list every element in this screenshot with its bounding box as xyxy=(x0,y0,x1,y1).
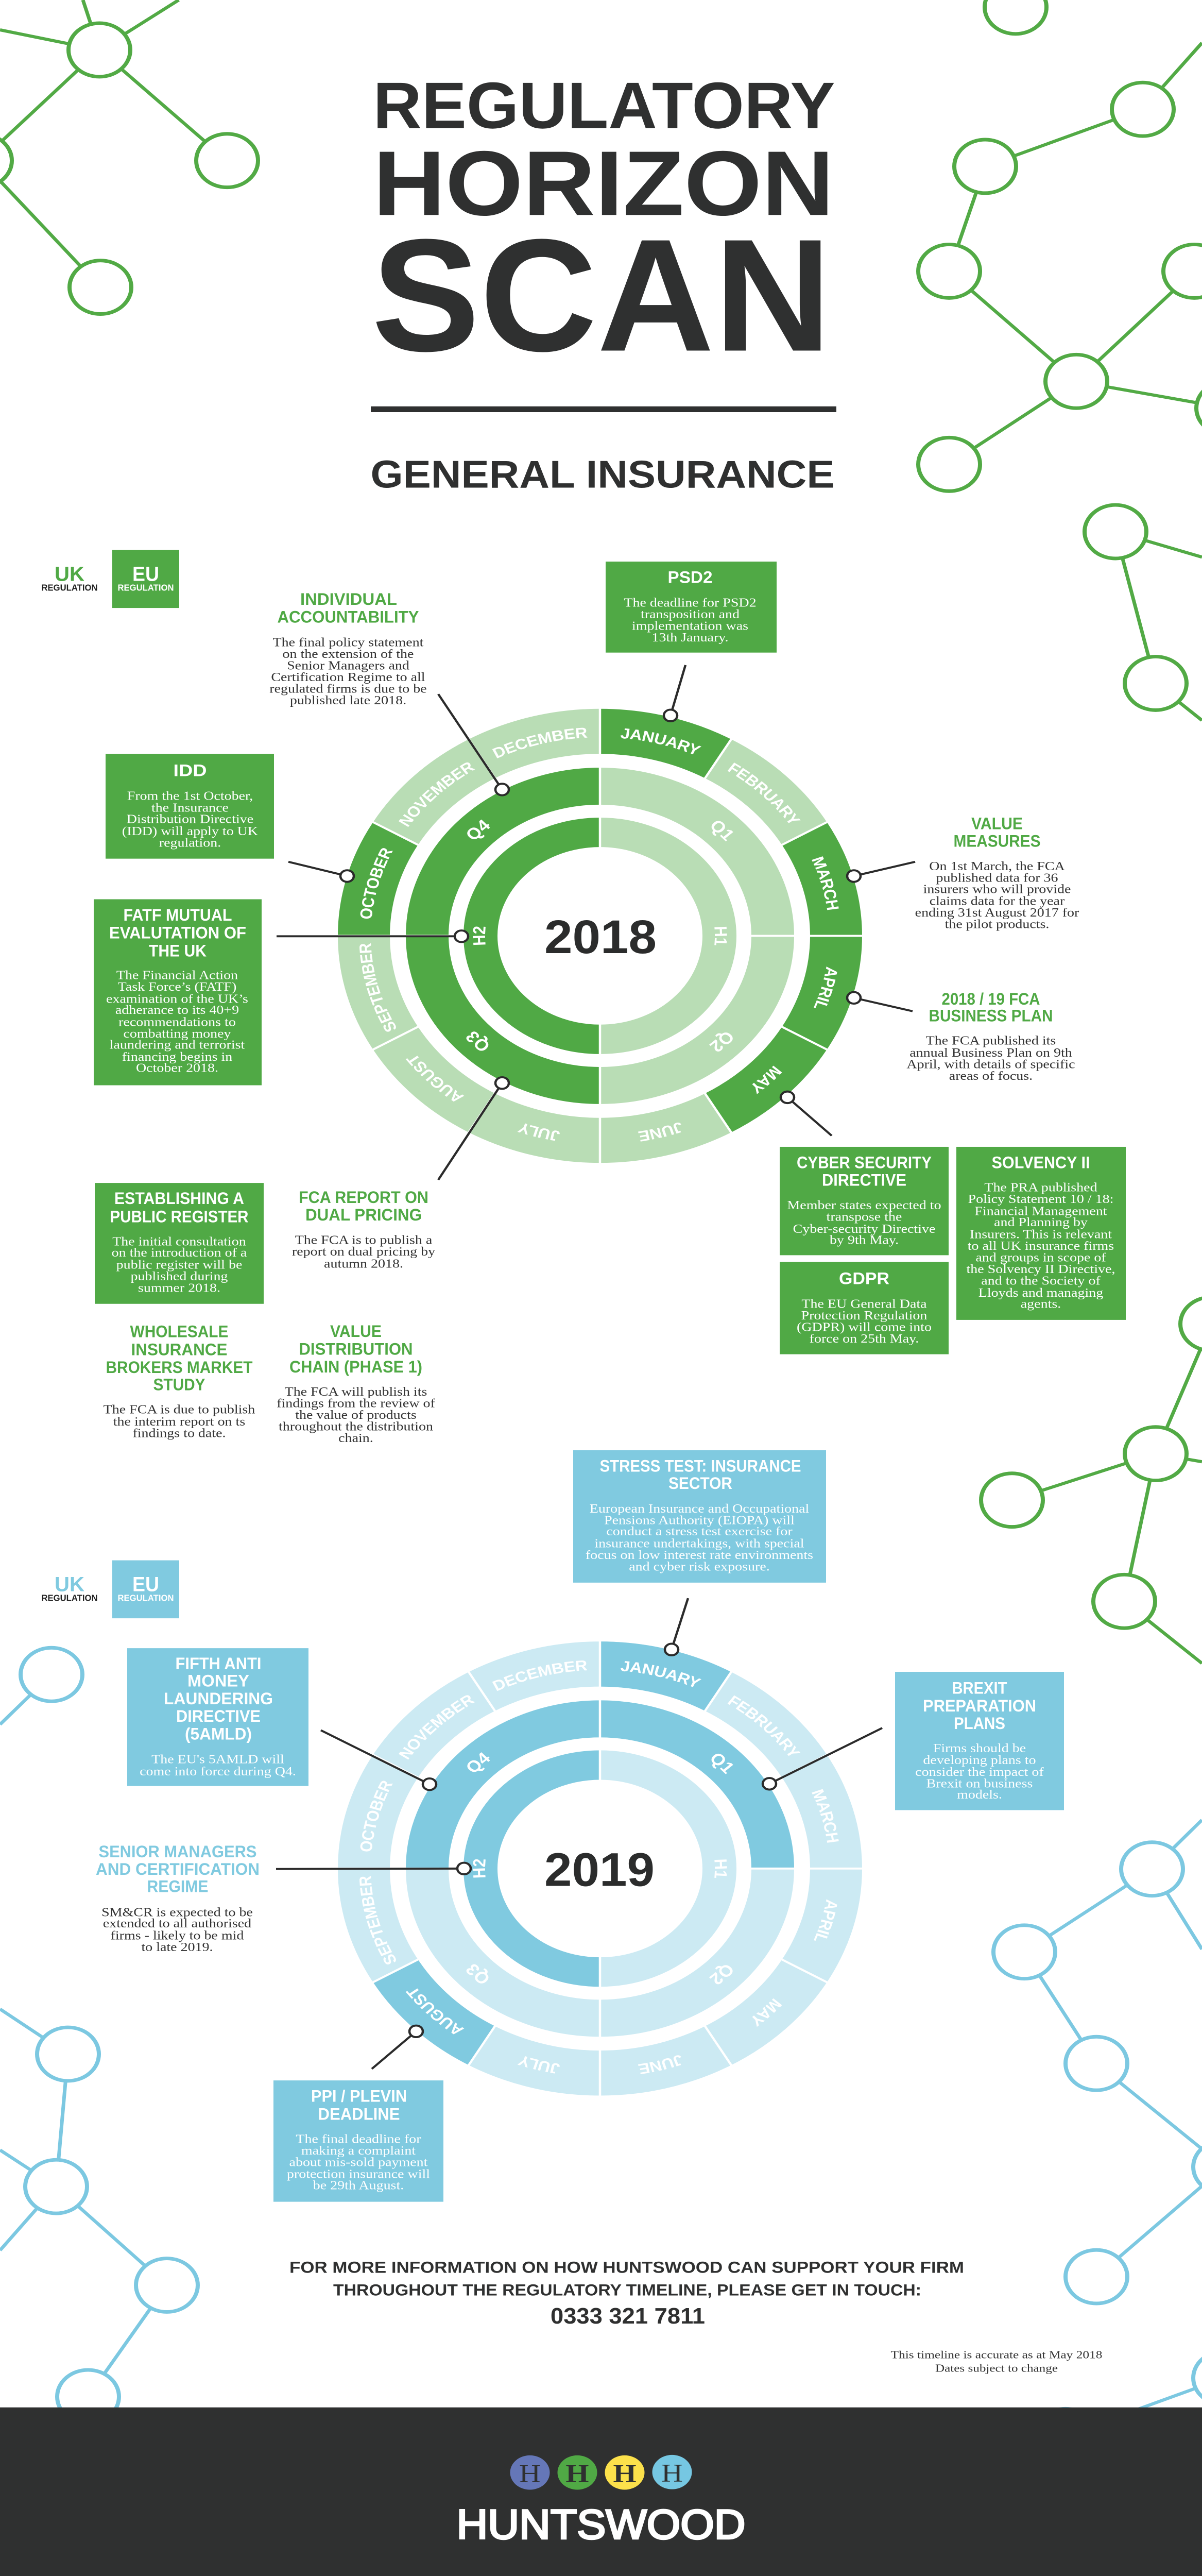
text block: value measures: ending 31st August 2017 for xyxy=(915,906,1079,920)
panel: establishing a public register: public register will be xyxy=(116,1258,242,1272)
panel: stress test: Pensions Authority (EIOPA) will xyxy=(604,1513,795,1527)
phone number: 0333 321 7811 xyxy=(551,2303,705,2328)
text block: individual accountability: Senior Managers and xyxy=(287,658,409,672)
quarter labels 2019: Q3 xyxy=(467,1964,488,1984)
logo mark: four H circles: H xyxy=(661,2459,683,2487)
legend: EU regulation: REGULATION xyxy=(118,583,174,592)
year 2018: 2018 xyxy=(544,911,657,964)
legend: EU regulation xyxy=(112,1561,179,1618)
leader: fifth AML directive xyxy=(321,1730,436,1790)
text block: individual accountability: published late 2018. xyxy=(290,693,406,707)
panel: fifth anti money laundering directive: FIFTH ANTI xyxy=(176,1655,262,1673)
panel: FATF mutual evaluation: laundering and terrorist xyxy=(110,1038,245,1052)
panel: GDPR: (GDPR) will come into xyxy=(797,1320,932,1334)
legend: UK regulation: UK xyxy=(55,563,84,586)
panel: PSD2: 13th January. xyxy=(652,631,728,645)
legend: EU regulation: REGULATION xyxy=(118,1593,174,1603)
panel: Solvency II: and Planning by xyxy=(994,1215,1088,1229)
panel: establishing a public register: PUBLIC REGISTER xyxy=(110,1208,249,1226)
panel: Solvency II: and groups in scope of xyxy=(975,1250,1106,1264)
month labels 2018: MARCH xyxy=(812,856,839,910)
quarter ring 2019 xyxy=(427,1719,772,2018)
month labels 2018: MAY xyxy=(752,1065,782,1094)
panel: PPI / Plevin deadline: about mis-sold payment xyxy=(289,2155,428,2169)
text block: value measures: the pilot products. xyxy=(945,917,1049,931)
panel: brexit preparation plans: developing plans to xyxy=(923,1753,1036,1767)
panel: brexit preparation plans: PREPARATION xyxy=(923,1697,1036,1715)
quarter labels 2019 xyxy=(462,1749,738,1988)
quarter labels 2018: Q4 xyxy=(467,819,490,839)
panel: FATF mutual evaluation: The Financial Action xyxy=(116,968,238,982)
month labels 2018: JULY xyxy=(517,1123,560,1141)
panel: cyber security directive: DIRECTIVE xyxy=(822,1172,906,1190)
panel: Solvency II: SOLVENCY II xyxy=(992,1154,1090,1172)
panel: PSD2: The deadline for PSD2 xyxy=(624,596,757,609)
half-year labels 2019: H2 xyxy=(469,1858,489,1879)
panel: stress test: SECTOR xyxy=(668,1475,732,1493)
legend 2019 xyxy=(41,1561,179,1618)
leader: FCA report on dual pricing xyxy=(438,1077,509,1180)
month labels 2018: APRIL xyxy=(814,967,837,1008)
month labels 2019: SEPTEMBER xyxy=(359,1876,396,1964)
month labels 2018: OCTOBER xyxy=(360,848,393,919)
month labels 2019: JULY xyxy=(517,2056,560,2074)
text block: senior managers and certification regime: extended to all authorised xyxy=(103,1917,251,1930)
panel: PSD2: PSD2 xyxy=(667,569,713,587)
panel: FATF mutual evaluation: adherance to its 40+9 xyxy=(115,1003,239,1017)
text block: senior managers and certification regime: SENIOR MANAGERS xyxy=(99,1843,256,1861)
panel: stress test: STRESS TEST: INSURANCE xyxy=(599,1458,801,1476)
title rule xyxy=(371,406,836,412)
logo mark: four H circles xyxy=(510,2455,692,2489)
panel: establishing a public register xyxy=(95,1183,264,1304)
panel: stress test: European Insurance and Occupational xyxy=(590,1502,809,1515)
call to action: THROUGHOUT THE REGULATORY TIMELINE, PLEASE GET IN TOUCH: xyxy=(333,2282,921,2299)
text block: wholesale insurance brokers market study: The FCA is due to publish xyxy=(104,1402,255,1416)
wheel 2018 xyxy=(335,706,865,1165)
text block: wholesale insurance brokers market study: STUDY xyxy=(153,1376,205,1394)
month labels 2018: NOVEMBER xyxy=(399,762,475,827)
accuracy note xyxy=(891,2349,1103,2374)
text block: wholesale insurance brokers market study: WHOLESALE xyxy=(130,1323,229,1341)
panel: stress test xyxy=(573,1450,826,1583)
panel: IDD: the Insurance xyxy=(151,801,229,815)
text block: FCA report on dual pricing: FCA REPORT ON xyxy=(299,1189,428,1207)
month labels 2019: AUGUST xyxy=(406,1989,465,2034)
quarter labels 2018: Q2 xyxy=(709,1032,733,1052)
month labels 2019: DECEMBER xyxy=(492,1660,587,1691)
legend: UK regulation xyxy=(41,1573,98,1603)
title line: scan: SCAN xyxy=(372,206,832,385)
month labels 2019: NOVEMBER xyxy=(399,1695,475,1760)
month labels 2018: FEBRUARY xyxy=(727,762,800,823)
legend: UK regulation: REGULATION xyxy=(41,1593,98,1603)
text block: senior managers and certification regime: firms - likely to be mid xyxy=(111,1928,244,1942)
text block: senior managers and certification regime: REGIME xyxy=(147,1878,209,1896)
text block: wholesale insurance brokers market study: INSURANCE xyxy=(131,1341,228,1359)
panel: cyber security directive: transpose the xyxy=(827,1210,902,1224)
half-year ring 2019 xyxy=(480,1765,719,1972)
panel: brexit preparation plans xyxy=(895,1672,1064,1810)
panel: FATF mutual evaluation xyxy=(94,899,262,1085)
panel: establishing a public register: published during xyxy=(131,1269,228,1283)
panel: GDPR xyxy=(780,1262,949,1354)
panel: fifth anti money laundering directive: The EU's 5AMLD will xyxy=(151,1752,284,1766)
panel: fifth anti money laundering directive: come into force during Q4. xyxy=(140,1765,296,1778)
text block: individual accountability: on the extension of the xyxy=(283,647,414,661)
quarter labels 2018: Q3 xyxy=(467,1031,488,1051)
panel: brexit preparation plans: Brexit on business xyxy=(926,1776,1033,1790)
panel: IDD: IDD xyxy=(174,762,207,780)
legend: UK regulation xyxy=(41,563,98,592)
text block: senior managers and certification regime: SM&CR is expected to be xyxy=(101,1905,253,1919)
panel: FATF mutual evaluation: THE UK xyxy=(149,942,207,960)
panel: FATF mutual evaluation: examination of the UK’s xyxy=(106,992,248,1006)
panel: brexit preparation plans: consider the impact of xyxy=(915,1765,1044,1778)
panel: cyber security directive xyxy=(780,1147,949,1255)
panel: IDD xyxy=(106,754,274,859)
year 2019: 2019 xyxy=(544,1843,655,1896)
text block: value distribution chain: VALUE xyxy=(330,1323,382,1341)
half-year labels 2019 xyxy=(469,1858,731,1879)
month ring 2018 xyxy=(364,731,836,1140)
panel: FATF mutual evaluation: Task Force’s (FATF) xyxy=(118,980,236,993)
text block: value measures: On 1st March, the FCA xyxy=(929,859,1065,873)
call to action xyxy=(289,2259,964,2328)
text block: 2018/19 FCA business plan: areas of focus. xyxy=(949,1069,1033,1083)
panel: stress test: conduct a stress test exercise for xyxy=(606,1524,793,1538)
quarter labels 2019: Q2 xyxy=(709,1965,733,1985)
panel: brexit preparation plans: Firms should be xyxy=(933,1741,1026,1755)
panel: cyber security directive: by 9th May. xyxy=(830,1233,899,1247)
network: green middle right xyxy=(981,1297,1202,1664)
month labels 2019: APRIL xyxy=(814,1899,837,1941)
text block: 2018/19 FCA business plan: 2018 / 19 FCA xyxy=(941,990,1040,1008)
text block: FCA report on dual pricing xyxy=(292,1189,435,1270)
panel: Solvency II xyxy=(956,1147,1126,1320)
month labels 2019: MARCH xyxy=(812,1789,839,1843)
leader: brexit xyxy=(763,1728,882,1790)
month labels 2019 xyxy=(355,1657,843,2077)
quarter labels 2019: Q4 xyxy=(462,1749,494,1777)
text block: individual accountability: INDIVIDUAL xyxy=(300,590,397,608)
network: green top right xyxy=(918,0,1202,720)
footer band xyxy=(0,2408,1202,2576)
text block: value distribution chain: findings from the review of xyxy=(277,1396,435,1410)
panel: FATF mutual evaluation: October 2018. xyxy=(136,1061,218,1075)
text block: individual accountability: Certification Regime to all xyxy=(271,670,425,684)
text block: FCA report on dual pricing: report on dual pricing by xyxy=(292,1245,435,1259)
text block: value distribution chain: The FCA will publish its xyxy=(285,1385,427,1399)
panel: fifth anti money laundering directive: MONEY xyxy=(187,1672,249,1690)
panel: stress test: insurance undertakings, with special xyxy=(594,1536,804,1550)
panel: Solvency II: Financial Management xyxy=(974,1204,1107,1218)
text block: individual accountability: regulated firms is due to be xyxy=(269,682,427,696)
text block: value distribution chain: throughout the distribution xyxy=(279,1419,433,1433)
subtitle: GENERAL INSURANCE xyxy=(371,453,835,496)
month labels 2018 xyxy=(355,724,843,1145)
title line: regulatory: REGULATORY xyxy=(373,70,835,142)
panel: fifth anti money laundering directive: (5AMLD) xyxy=(185,1725,252,1743)
month labels 2019: JANUARY xyxy=(621,1661,701,1687)
panel: GDPR: GDPR xyxy=(839,1270,889,1288)
panel: FATF mutual evaluation: recommendations to xyxy=(118,1015,236,1029)
logo mark: four H circles: H xyxy=(519,2459,541,2487)
quarter labels 2018: Q1 xyxy=(712,821,733,842)
text block: 2018/19 FCA business plan: April, with details of specific xyxy=(906,1057,1075,1071)
panel: fifth anti money laundering directive xyxy=(127,1648,308,1786)
legend: EU regulation: EU xyxy=(132,563,159,586)
quarter labels 2019: Q1 xyxy=(712,1754,733,1774)
logo mark: four H circles: H xyxy=(613,2459,637,2487)
legend 2018 xyxy=(41,550,179,608)
panel: PPI / Plevin deadline: making a complaint xyxy=(301,2144,416,2157)
panel: PSD2: transposition and xyxy=(641,607,740,621)
panel: Solvency II: Lloyds and managing xyxy=(978,1286,1103,1299)
panel: PPI / Plevin deadline: PPI / PLEVIN xyxy=(311,2088,407,2106)
text block: 2018/19 FCA business plan: The FCA published its xyxy=(926,1033,1056,1047)
text block: 2018/19 FCA business plan xyxy=(906,990,1075,1083)
legend: UK regulation: UK xyxy=(55,1573,84,1596)
month labels 2019: JUNE xyxy=(638,2055,681,2074)
month labels 2018: DECEMBER xyxy=(492,727,587,758)
wheel 2019 xyxy=(335,1639,865,2098)
text block: value measures: MEASURES xyxy=(954,833,1041,851)
text block: wholesale insurance brokers market study: the interim report on ts xyxy=(113,1415,245,1429)
panel: Solvency II: the Solvency II Directive, xyxy=(966,1262,1115,1276)
panel: establishing a public register: The initial consultation xyxy=(112,1234,246,1248)
text block: value measures: insurers who will provide xyxy=(923,882,1071,896)
logo mark: four H circles: H xyxy=(565,2459,589,2487)
text block: wholesale insurance brokers market study: BROKERS MARKET xyxy=(106,1359,253,1377)
month labels 2019: FEBRUARY xyxy=(727,1695,800,1756)
month ring 2019 xyxy=(364,1664,836,2073)
footer logo xyxy=(457,2455,746,2548)
text block: value measures: VALUE xyxy=(971,815,1023,833)
leader: senior managers xyxy=(276,1863,471,1874)
legend: UK regulation: REGULATION xyxy=(41,583,98,592)
panel: PSD2: implementation was xyxy=(632,619,748,633)
text block: value distribution chain: CHAIN (PHASE 1) xyxy=(289,1358,422,1376)
panel: FATF mutual evaluation: FATF MUTUAL xyxy=(124,906,232,924)
panel: brexit preparation plans: models. xyxy=(957,1788,1002,1801)
text block: value measures: published data for 36 xyxy=(936,871,1058,885)
text block: value distribution chain: DISTRIBUTION xyxy=(299,1341,413,1359)
panel: IDD: Distribution Directive xyxy=(127,812,253,826)
month labels 2019: MAY xyxy=(752,1998,782,2027)
panel: establishing a public register: summer 2018. xyxy=(138,1281,220,1295)
panel: IDD: regulation. xyxy=(159,836,221,850)
leader: May items xyxy=(781,1092,832,1136)
panel: Solvency II: The PRA published xyxy=(984,1180,1097,1194)
panel: fifth anti money laundering directive: DIRECTIVE xyxy=(176,1707,261,1725)
wordmark: HUNTSWOOD xyxy=(457,2501,746,2548)
text block: wholesale insurance brokers market study: findings to date. xyxy=(132,1426,226,1440)
month labels 2018: AUGUST xyxy=(406,1056,465,1101)
text block: value measures xyxy=(915,815,1079,931)
panel: PPI / Plevin deadline: The final deadline for xyxy=(296,2132,421,2146)
legend: EU regulation xyxy=(112,550,179,608)
panel: brexit preparation plans: BREXIT xyxy=(952,1680,1007,1698)
panel: PPI / Plevin deadline: DEADLINE xyxy=(318,2106,400,2124)
month labels 2018: SEPTEMBER xyxy=(359,943,396,1032)
panel: GDPR: The EU General Data xyxy=(801,1297,927,1311)
panel: PPI / Plevin deadline: be 29th August. xyxy=(313,2178,404,2192)
half-year labels 2019: H1 xyxy=(711,1858,731,1879)
panel: Solvency II: and to the Society of xyxy=(981,1274,1101,1287)
panel: establishing a public register: on the introduction of a xyxy=(112,1246,247,1260)
panel: establishing a public register: ESTABLISHING A xyxy=(114,1190,244,1208)
ring dividers 2018 xyxy=(335,706,865,1165)
panel: IDD: From the 1st October, xyxy=(127,789,253,803)
quarter ring 2018 xyxy=(427,786,772,1086)
text block: senior managers and certification regime: AND CERTIFICATION xyxy=(96,1860,260,1878)
title block xyxy=(371,70,836,496)
text block: individual accountability xyxy=(269,590,427,707)
network: green top left xyxy=(0,0,258,314)
panel: GDPR: Protection Regulation xyxy=(801,1309,927,1323)
panel: GDPR: force on 25th May. xyxy=(810,1332,919,1346)
month labels 2019: OCTOBER xyxy=(360,1781,393,1852)
legend: EU regulation: EU xyxy=(132,1573,159,1596)
panel: stress test: and cyber risk exposure. xyxy=(629,1560,770,1573)
call to action: FOR MORE INFORMATION ON HOW HUNTSWOOD CAN SUPPORT YOUR FIRM xyxy=(289,2259,964,2277)
panel: Solvency II: agents. xyxy=(1021,1297,1061,1311)
panel: PSD2 xyxy=(606,562,777,653)
text block: individual accountability: ACCOUNTABILITY xyxy=(278,608,419,626)
text block: 2018/19 FCA business plan: annual Business Plan on 9th xyxy=(909,1046,1072,1060)
half-year ring 2018 xyxy=(480,833,719,1039)
network: blue right xyxy=(993,1820,1202,2462)
panel: PPI / Plevin deadline xyxy=(273,2080,443,2202)
panel: Solvency II: Policy Statement 10 / 18: xyxy=(968,1192,1113,1206)
text block: value measures: claims data for the year xyxy=(930,894,1065,908)
text block: wholesale insurance brokers market study xyxy=(104,1323,255,1440)
panel: fifth anti money laundering directive: LAUNDERING xyxy=(164,1690,273,1708)
text block: FCA report on dual pricing: The FCA is to publish a xyxy=(295,1233,433,1247)
month labels 2018: JANUARY xyxy=(621,728,701,754)
panel: FATF mutual evaluation: combatting money xyxy=(123,1027,231,1040)
text block: value distribution chain xyxy=(277,1323,435,1445)
leader: stress test xyxy=(665,1598,688,1655)
leader: individual accountability xyxy=(438,694,509,795)
panel: Solvency II: to all UK insurance firms xyxy=(968,1239,1114,1253)
text block: value distribution chain: the value of products xyxy=(295,1408,417,1422)
leader: PSD2 xyxy=(664,665,685,721)
text block: senior managers and certification regime xyxy=(96,1843,260,1954)
text block: 2018/19 FCA business plan: BUSINESS PLAN xyxy=(929,1007,1053,1025)
panel: cyber security directive: Cyber-security Directive xyxy=(793,1222,935,1236)
panel: FATF mutual evaluation: financing begins in xyxy=(122,1050,232,1063)
accuracy note: Dates subject to change xyxy=(935,2362,1058,2374)
leader: IDD xyxy=(288,862,354,882)
leader: FCA business plan xyxy=(847,992,913,1011)
panel: FATF mutual evaluation: EVALUTATION OF xyxy=(109,924,246,942)
month labels 2018: JUNE xyxy=(638,1122,681,1142)
half-year labels 2018: H1 xyxy=(714,926,727,945)
leader: value measures xyxy=(847,862,915,882)
text block: FCA report on dual pricing: DUAL PRICING xyxy=(305,1206,422,1224)
text block: FCA report on dual pricing: autumn 2018. xyxy=(324,1257,403,1270)
panel: cyber security directive: Member states expected to xyxy=(787,1198,941,1212)
leader: PPI xyxy=(372,2026,423,2069)
text block: individual accountability: The final policy statement xyxy=(273,635,424,649)
panel: PPI / Plevin deadline: protection insurance will xyxy=(287,2167,430,2181)
accuracy note: This timeline is accurate as at May 2018 xyxy=(891,2349,1103,2361)
panel: stress test: focus on low interest rate environments xyxy=(586,1548,813,1562)
panel: brexit preparation plans: PLANS xyxy=(954,1715,1005,1733)
text block: senior managers and certification regime: to late 2019. xyxy=(141,1940,213,1954)
title line: horizon: HORIZON xyxy=(373,132,834,234)
network: blue left xyxy=(0,1648,198,2424)
panel: Solvency II: Insurers. This is relevant xyxy=(970,1227,1112,1241)
quarter labels 2018 xyxy=(462,816,738,1055)
half-year labels 2018 xyxy=(469,925,731,946)
panel: cyber security directive: CYBER SECURITY xyxy=(797,1154,932,1172)
panel: IDD: (IDD) will apply to UK xyxy=(122,824,258,838)
half-year labels 2018: H2 xyxy=(473,926,486,945)
ring dividers 2019 xyxy=(335,1639,865,2098)
leader: FATF xyxy=(277,930,468,942)
text block: value distribution chain: chain. xyxy=(338,1431,373,1445)
